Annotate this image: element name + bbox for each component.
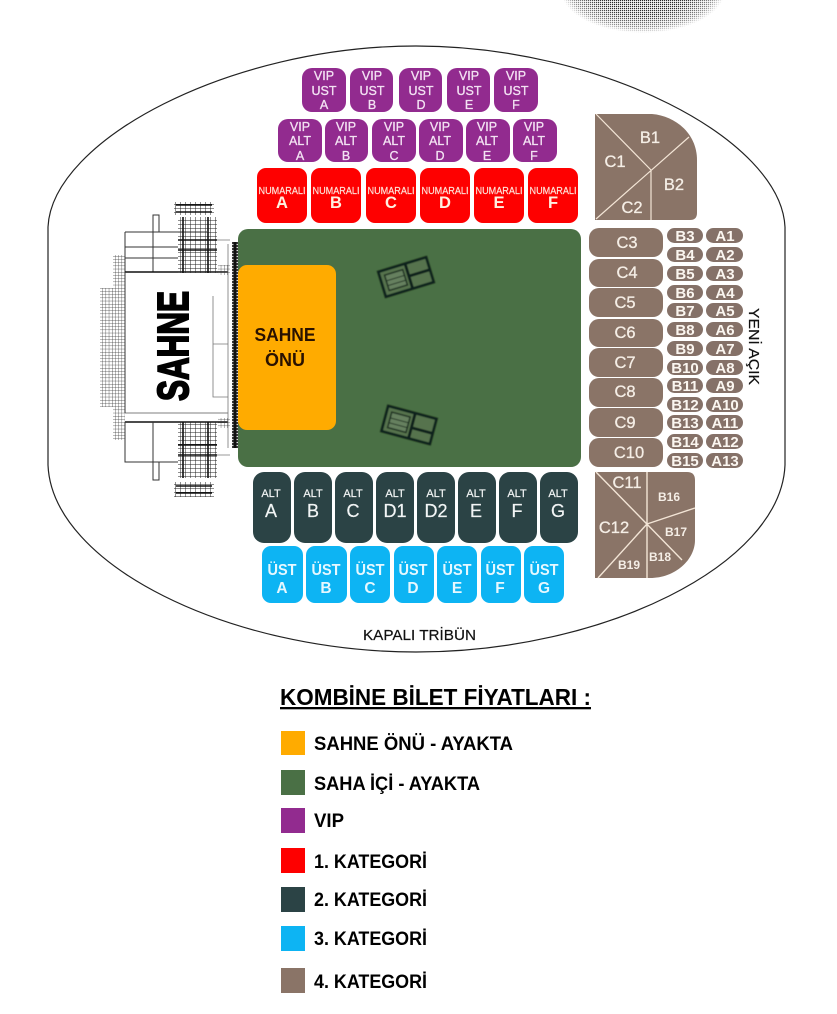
seat: NUMARALI F: NUMARALI [530, 186, 576, 197]
legend item: saha içi: SAHA İÇİ - AYAKTA [314, 774, 480, 795]
panel: upper corner B1 B2 C1 C2: C2 [621, 199, 643, 217]
seat: ÜST C: ÜST [356, 562, 385, 579]
seat: B5: B5 [675, 266, 695, 283]
seat: VIP ALT D: VIP [430, 120, 450, 134]
seat: B6 [667, 285, 703, 302]
panel: VIP üst [302, 68, 538, 112]
seat: VIP UST A [302, 68, 346, 112]
seat: NUMARALI E: E [493, 194, 505, 212]
seat: ÜST A [262, 546, 303, 603]
seat: A2: A2 [715, 247, 735, 264]
seat: VIP ALT A: VIP [290, 120, 310, 134]
panel: lower corner C11 C12 B16-B19: B19 [618, 558, 640, 572]
seat: ÜST E [437, 546, 477, 603]
seat: ÜST G: ÜST [530, 562, 559, 579]
panel: sahne önü: ÖNÜ [265, 350, 305, 370]
seat: VIP UST B [350, 68, 393, 112]
seat: VIP UST E: VIP [459, 69, 479, 83]
seat: B3 [667, 228, 703, 245]
seat: NUMARALI C [366, 168, 416, 223]
legend item: VIP: VIP [314, 811, 344, 832]
legend item: 1. kategori: 1. KATEGORİ [314, 852, 427, 873]
seat: ALT C [335, 472, 373, 543]
seat: VIP ALT B: VIP [336, 120, 356, 134]
seat: C3 [589, 228, 663, 257]
panel: lower corner C11 C12 B16-B19: C11 [612, 474, 642, 492]
seat: A9: A9 [715, 378, 735, 395]
seat: VIP UST E: UST [456, 84, 482, 98]
sound desk bottom [381, 406, 437, 444]
seat: ÜST D [394, 546, 434, 603]
seat: NUMARALI C: C [385, 194, 397, 212]
seat: B3: B3 [675, 228, 695, 245]
panel: alt tribün [253, 472, 578, 543]
seat: C9 [589, 408, 663, 437]
seat: VIP ALT A: ALT [289, 134, 311, 148]
seat: C6 [589, 319, 663, 347]
seat: VIP ALT C [372, 119, 416, 163]
seat: ÜST B: ÜST [312, 562, 341, 579]
legend [281, 731, 513, 993]
seat: A4 [706, 285, 743, 302]
seat: ALT E [458, 472, 496, 543]
seat: VIP UST D: UST [408, 84, 434, 98]
sound desk top [378, 257, 434, 297]
seat: B8: B8 [675, 322, 695, 339]
seat: ALT D1: ALT [385, 488, 405, 500]
seat: C7 [589, 348, 663, 377]
seat: A7: A7 [715, 341, 735, 358]
seat: VIP ALT F [513, 119, 557, 163]
stage structure [100, 202, 238, 497]
seat: NUMARALI A [257, 168, 307, 223]
panel: upper corner B1 B2 C1 C2: B1 [640, 129, 660, 147]
panel: lower corner C11 C12 B16-B19 [595, 472, 695, 578]
seat: VIP UST F: VIP [506, 69, 526, 83]
panel: VIP alt [278, 119, 557, 163]
seat: ALT D2: ALT [426, 488, 446, 500]
seat: VIP ALT B: ALT [335, 134, 357, 148]
seat: ALT F: ALT [507, 488, 527, 500]
seat: C8: C8 [614, 383, 636, 401]
legend item: 1. kategori [281, 848, 427, 873]
seat: ÜST F: F [495, 580, 505, 597]
seat: B13: B13 [671, 415, 699, 432]
seat: ALT E: ALT [466, 488, 486, 500]
seat: ÜST A: ÜST [268, 562, 297, 579]
seat: VIP ALT F: F [530, 149, 538, 163]
seat: NUMARALI D: NUMARALI [422, 186, 468, 197]
panel: A pills [706, 228, 743, 470]
label: kapalı tribün: KAPALI TRİBÜN [363, 626, 476, 644]
legend item: 4. kategori: 4. KATEGORİ [314, 972, 427, 993]
panel: B pills [667, 228, 703, 470]
seat: NUMARALI B: NUMARALI [312, 186, 360, 197]
seat: B12: B12 [671, 397, 699, 414]
seat: NUMARALI C: NUMARALI [368, 186, 414, 197]
seat: VIP ALT C: ALT [383, 134, 405, 148]
seat: NUMARALI F: F [548, 194, 558, 212]
seat: VIP ALT E: VIP [477, 120, 497, 134]
panel: lower corner C11 C12 B16-B19: B18 [649, 550, 671, 564]
seat: NUMARALI E: NUMARALI [476, 186, 522, 197]
seat: C10: C10 [614, 444, 644, 462]
seat: ALT B: ALT [303, 488, 323, 500]
seat: A12: A12 [711, 434, 739, 451]
seat: VIP UST A: VIP [314, 69, 334, 83]
seat: NUMARALI F [528, 168, 578, 223]
seat: A3 [706, 266, 743, 283]
seat: A5 [706, 303, 743, 320]
panel: upper corner B1 B2 C1 C2 [595, 114, 697, 220]
seat: ALT F: F [512, 501, 522, 521]
seat: A8 [706, 360, 743, 377]
seat: ALT F [499, 472, 537, 543]
seat: B14: B14 [671, 434, 699, 451]
seat: ALT G [540, 472, 578, 543]
seat: VIP ALT F: VIP [524, 120, 544, 134]
seat: NUMARALI B: B [330, 194, 342, 212]
seat: C5: C5 [614, 294, 636, 312]
panel: sahne önü: SAHNE [254, 325, 316, 345]
seat: VIP ALT F: ALT [523, 134, 545, 148]
seat: ÜST F [481, 546, 521, 603]
seat: A6 [706, 322, 743, 339]
stage label: SAHNE: SAHNE [149, 291, 198, 401]
seat: VIP ALT E: ALT [476, 134, 498, 148]
seat: C4 [589, 259, 663, 287]
seat: ÜST D: D [407, 580, 419, 597]
seat: VIP UST D: VIP [411, 69, 431, 83]
seat: NUMARALI D [420, 168, 470, 223]
seat: VIP UST A: UST [312, 84, 337, 98]
seat: ALT G: ALT [548, 488, 568, 500]
legend item: 2. kategori: 2. KATEGORİ [314, 890, 427, 911]
seat: VIP ALT D [419, 119, 463, 163]
seat: A4: A4 [715, 285, 735, 302]
seat: B11: B11 [672, 378, 698, 395]
seat: ÜST D: ÜST [398, 562, 428, 579]
seat: ALT A: ALT [261, 488, 281, 500]
seat: A3: A3 [715, 266, 735, 283]
seat: B5 [667, 266, 703, 283]
seat: ÜST B: B [320, 580, 332, 597]
legend item: 2. kategori [281, 887, 427, 912]
seat: VIP ALT D: ALT [429, 134, 451, 148]
legend item: 3. kategori [281, 926, 427, 951]
seat: ÜST E: ÜST [442, 562, 472, 579]
seat: C3: C3 [616, 234, 638, 252]
seat: NUMARALI E [474, 168, 524, 223]
seat: VIP ALT A: A [296, 149, 305, 163]
seat: C5 [589, 288, 663, 317]
seat: B4: B4 [675, 247, 695, 264]
seat: A9 [706, 378, 743, 395]
panel: C blocks [589, 228, 663, 467]
seat: VIP ALT B: B [342, 149, 350, 163]
seat: VIP UST E [447, 68, 490, 112]
seat: A6: A6 [715, 322, 735, 339]
seat: ALT C: C [346, 501, 360, 521]
seat: B10: B10 [671, 360, 699, 377]
seat: VIP UST F: UST [504, 84, 529, 98]
seat: A1 [706, 228, 743, 245]
seat: VIP ALT E: E [483, 149, 491, 163]
label: yeni açık: YENİ AÇIK [745, 308, 763, 385]
seat: VIP UST F: F [512, 98, 520, 112]
legend title: KOMBİNE BİLET FİYATLARI : [280, 684, 591, 710]
seat: A10: A10 [711, 397, 739, 414]
seat: ÜST A: A [276, 580, 288, 597]
seat: VIP UST A: A [320, 98, 329, 112]
legend item: sahne önü: SAHNE ÖNÜ - AYAKTA [314, 734, 513, 755]
seat: A2 [706, 247, 743, 264]
seat: C6: C6 [614, 324, 636, 342]
seat: NUMARALI B [311, 168, 361, 223]
seat: VIP ALT C: VIP [384, 120, 404, 134]
seat: A8: A8 [715, 360, 735, 377]
seat: VIP ALT C: C [389, 149, 399, 163]
seat: A13: A13 [711, 453, 739, 470]
seat: B15: B15 [671, 453, 699, 470]
seat: ÜST G: G [538, 580, 550, 597]
panel: upper corner B1 B2 C1 C2: B2 [664, 176, 684, 194]
panel: lower corner C11 C12 B16-B19: C12 [599, 519, 629, 537]
panel: lower corner C11 C12 B16-B19: B17 [665, 525, 687, 539]
seat: B8 [667, 322, 703, 339]
seat: ALT G: G [551, 501, 565, 521]
seat: VIP UST B: UST [360, 84, 385, 98]
seat: C9: C9 [614, 414, 636, 432]
seat: ALT D1 [376, 472, 414, 543]
seat: B7: B7 [675, 303, 695, 320]
panel: üst tribün [262, 546, 564, 603]
seat: C8 [589, 378, 663, 407]
legend item: saha içi [281, 770, 480, 795]
seat: ALT B: B [307, 501, 319, 521]
field: saha içi [238, 229, 581, 467]
seat: NUMARALI A: A [276, 194, 288, 212]
legend item: 3. kategori: 3. KATEGORİ [314, 929, 427, 950]
seat: VIP UST B: VIP [362, 69, 382, 83]
seat: VIP ALT E [466, 119, 510, 163]
seat: B4 [667, 247, 703, 264]
panel: sahne önü [238, 265, 336, 430]
seat: B9 [667, 341, 703, 358]
seat: VIP UST F [494, 68, 538, 112]
panel: upper corner B1 B2 C1 C2: C1 [604, 153, 626, 171]
seat: VIP ALT D: D [435, 149, 445, 163]
panel: numaralı [257, 168, 578, 223]
panel: lower corner C11 C12 B16-B19: B16 [658, 490, 680, 504]
seat: ÜST F: ÜST [486, 562, 515, 579]
legend item: VIP [281, 808, 344, 833]
seat: ÜST G [524, 546, 564, 603]
seat: VIP UST B: B [368, 98, 376, 112]
seat: VIP UST E: E [465, 98, 473, 112]
seat: B9: B9 [675, 341, 695, 358]
seat: ALT A: A [265, 501, 277, 521]
seat: ALT E: E [470, 501, 482, 521]
seat: C4: C4 [616, 264, 638, 282]
seat: ÜST B [306, 546, 347, 603]
stadium outline [48, 46, 785, 652]
seat: NUMARALI D: D [439, 194, 451, 212]
seat: A5: A5 [715, 303, 735, 320]
seat: B7 [667, 303, 703, 320]
halftone decoration top [564, 0, 721, 32]
seat: ALT A [253, 472, 291, 543]
seat: NUMARALI A: NUMARALI [258, 186, 306, 197]
seat: ALT D2: D2 [424, 501, 448, 521]
seat: ÜST E: E [452, 580, 462, 597]
seat: VIP ALT B [325, 119, 368, 163]
seat: A7 [706, 341, 743, 358]
seat: C7: C7 [614, 354, 636, 372]
seat: ALT D2 [417, 472, 455, 543]
seat: ALT B [294, 472, 332, 543]
seat: VIP ALT A [278, 119, 322, 163]
seat: ÜST C: C [364, 580, 376, 597]
seat: B6: B6 [675, 285, 695, 302]
seat: ALT C: ALT [343, 488, 363, 500]
seat: VIP UST D: D [416, 98, 426, 112]
seat: A1: A1 [715, 228, 735, 245]
seat: ÜST C [350, 546, 390, 603]
seat: VIP UST D [399, 68, 442, 112]
legend item: 4. kategori [281, 968, 427, 993]
seat: C10 [589, 438, 663, 467]
seat: A11: A11 [712, 415, 738, 432]
seat: ALT D1: D1 [383, 501, 407, 521]
